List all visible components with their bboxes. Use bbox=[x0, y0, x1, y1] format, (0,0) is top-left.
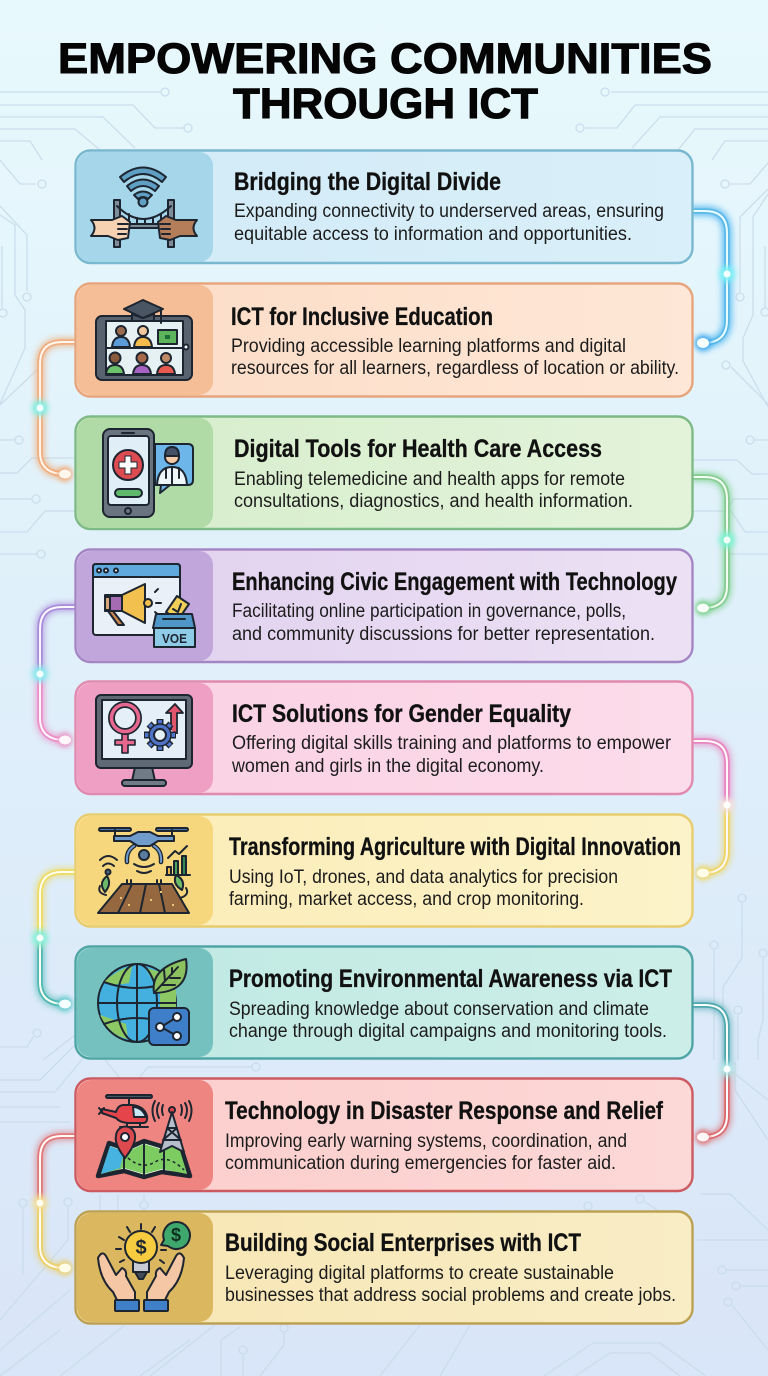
icon: monitor with female symbol and gear bbox=[96, 695, 192, 786]
panel: digital tools for health care access bbox=[76, 416, 692, 529]
panel: environmental awareness: change through digital campaigns and monitoring tools. bbox=[229, 1021, 667, 1042]
panel: ICT solutions for gender equality: women and girls in the digital economy. bbox=[231, 756, 544, 777]
heading: ICT for Inclusive Education bbox=[231, 303, 493, 331]
description: Facilitating online participation in governance, polls, bbox=[232, 601, 626, 622]
heading: ICT Solutions for Gender Equality bbox=[232, 700, 571, 728]
connector: card 5 to card 6 bbox=[693, 741, 734, 880]
panel: ICT for inclusive education bbox=[76, 284, 692, 396]
heading: Digital Tools for Health Care Access bbox=[234, 435, 602, 463]
connector: card 4 to card 5 bbox=[32, 607, 75, 747]
connector: card 1 to card 2 bbox=[693, 211, 735, 351]
description: Offering digital skills training and platforms to empower bbox=[232, 733, 672, 754]
icon: lightbulb, dollar and hands: $ bbox=[135, 1237, 147, 1259]
connector: card 7 to card 8 bbox=[693, 1005, 734, 1144]
description: Enabling telemedicine and health apps for remote bbox=[234, 469, 625, 490]
title bbox=[58, 35, 712, 128]
panel: transforming agriculture: farming, market access, and crop monitoring. bbox=[229, 889, 584, 910]
panel: transforming agriculture bbox=[76, 814, 692, 926]
title: EMPOWERING COMMUNITIES bbox=[58, 35, 712, 83]
description: Spreading knowledge about conservation and climate bbox=[229, 999, 649, 1020]
panel: enhancing civic engagement: and community discussions for better representation. bbox=[232, 624, 655, 645]
icon: wifi bridge with hands bbox=[91, 168, 197, 247]
description: Expanding connectivity to underserved areas, ensuring bbox=[234, 201, 664, 222]
icon: megaphone and ballot box: VOE bbox=[162, 631, 187, 646]
panel: environmental awareness bbox=[76, 946, 692, 1058]
description: Providing accessible learning platforms and digital bbox=[231, 336, 626, 357]
connector: card 8 to card 9 bbox=[33, 1136, 75, 1275]
panel: digital tools for health care access: consultations, diagnostics, and health information. bbox=[234, 491, 633, 512]
panel: bridging the digital divide bbox=[76, 150, 692, 263]
heading: Bridging the Digital Divide bbox=[234, 168, 501, 196]
panel: disaster response bbox=[76, 1078, 692, 1191]
panel: ICT solutions for gender equality bbox=[76, 682, 692, 794]
connector: card 3 to card 4 bbox=[693, 477, 735, 615]
panel: bridging the digital divide: equitable access to information and opportunities. bbox=[234, 224, 632, 245]
title: THROUGH ICT bbox=[233, 80, 538, 128]
connector: card 2 to card 3 bbox=[32, 342, 75, 481]
icon: lightbulb, dollar and hands bbox=[98, 1222, 190, 1311]
panel: social enterprises bbox=[76, 1212, 692, 1324]
panel: social enterprises: businesses that address social problems and create jobs. bbox=[225, 1285, 676, 1306]
description: Improving early warning systems, coordination, and bbox=[225, 1131, 627, 1152]
panel: disaster response: communication during emergencies for faster aid. bbox=[225, 1153, 616, 1174]
description: Using IoT, drones, and data analytics for precision bbox=[229, 867, 618, 888]
heading: Promoting Environmental Awareness via ICT bbox=[229, 965, 672, 993]
icon: globe, leaf and share box bbox=[98, 959, 189, 1045]
connector: card 6 to card 7 bbox=[32, 872, 75, 1011]
icon: helicopter, tower and map bbox=[98, 1095, 192, 1177]
icon: drone over field bbox=[98, 828, 190, 913]
icon: megaphone and ballot box bbox=[93, 564, 195, 647]
heading: Technology in Disaster Response and Relief bbox=[225, 1097, 664, 1125]
panel: ICT for inclusive education: resources for all learners, regardless of location or ability. bbox=[231, 358, 679, 379]
icon: phone with telehealth doctor bbox=[103, 429, 193, 517]
description: Leveraging digital platforms to create sustainable bbox=[225, 1263, 614, 1284]
panel: enhancing civic engagement bbox=[76, 550, 692, 662]
icon: lightbulb, dollar and hands: $ bbox=[171, 1225, 181, 1245]
heading: Building Social Enterprises with ICT bbox=[225, 1229, 581, 1257]
icon: tablet with class and graduation cap bbox=[96, 300, 192, 380]
